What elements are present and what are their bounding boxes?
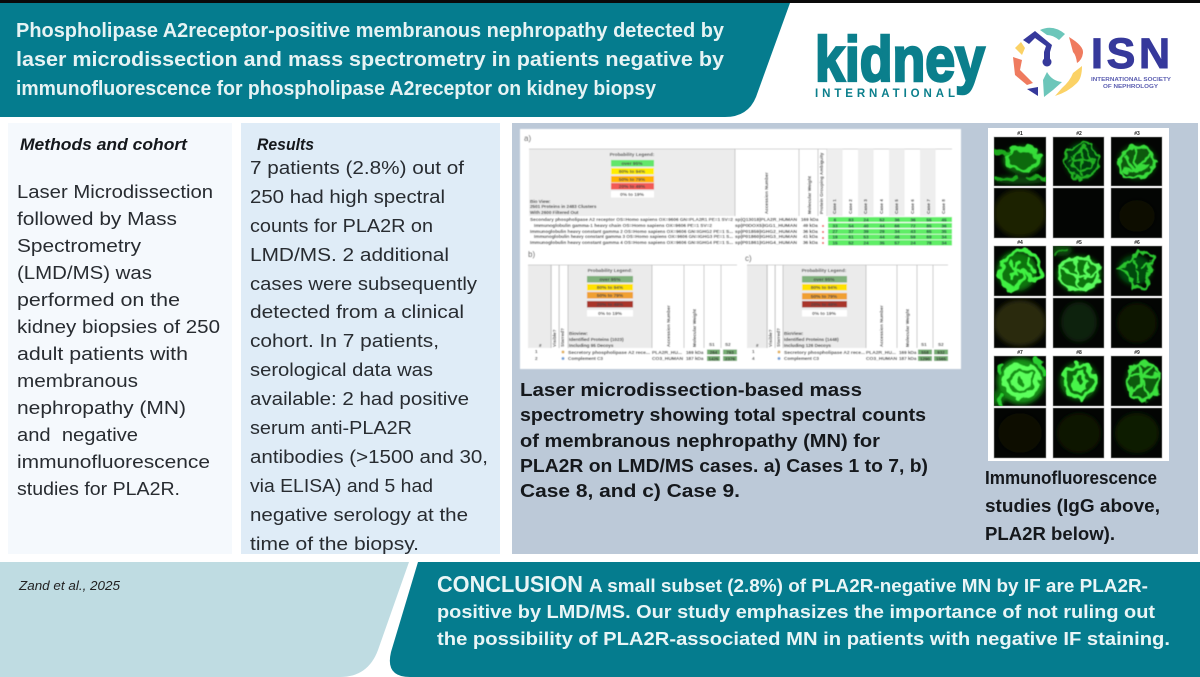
spectral counts a: 35 xyxy=(941,229,947,235)
spectral counts a: 27 xyxy=(832,229,838,235)
legend c: 0% to 19% xyxy=(812,311,837,317)
table a: Immunoglobulin gamma-1 heavy chain OS=Homo sapiens OX=9606 PE=1 SV=2 xyxy=(534,223,712,228)
spectral counts a: 19 xyxy=(832,234,838,240)
spectral counts a: 66 xyxy=(894,224,900,230)
table c: Visible? xyxy=(768,329,773,347)
legend c: 20% to 49% xyxy=(811,302,838,308)
table c: c) xyxy=(745,254,752,263)
spectral counts a: 15 xyxy=(832,240,838,246)
legend c: Probability Legend: xyxy=(802,268,847,274)
table a: sp|P01860|IGHG3_HUMAN xyxy=(735,234,798,239)
logo: ISN: OF NEPHROLOGY xyxy=(1103,84,1158,90)
table c: # xyxy=(756,343,759,348)
legend a: 0% to 19% xyxy=(620,192,645,198)
methods text xyxy=(17,181,220,499)
caption: immunofluorescence xyxy=(985,467,1160,544)
logo: ISN xyxy=(1013,28,1171,97)
caption: mass spectrometry xyxy=(520,379,928,501)
table a: Case 6 xyxy=(910,199,915,214)
table b: Secretory phospholipase A2 rece... xyxy=(568,350,650,355)
logo: ISN: INTERNATIONAL SOCIETY xyxy=(1091,77,1171,83)
results text xyxy=(250,157,488,554)
legend a: 80% to 94% xyxy=(619,169,646,175)
methods text: Spectrometry xyxy=(17,235,142,256)
panel labels: #8 xyxy=(1076,350,1082,356)
panel labels: #5 xyxy=(1076,240,1082,246)
caption: mass spectrometry: of membranous nephropathy (MN) for xyxy=(520,430,880,451)
table c xyxy=(745,254,953,362)
table a: Secondary phospholipase A2 receptor OS=Homo sapiens OX=9606 GN=PLA2R1 PE=1 SV=2 xyxy=(530,217,733,222)
table a: Immunoglobulin heavy constant gamma 3 OS=Homo sapiens OX=9606 GN=IGHG3 PE=1 S... xyxy=(534,234,733,239)
results text: serum anti-PLA2R xyxy=(250,417,412,438)
panel: results xyxy=(241,123,500,554)
heading: methods: Methods and cohort xyxy=(20,135,188,154)
heading: results: Results xyxy=(257,135,314,154)
table a: Bio View: xyxy=(530,199,551,204)
spectral counts a: 40 xyxy=(863,224,869,230)
spectral counts a: 46 xyxy=(894,234,900,240)
spectral counts a: 34 xyxy=(941,234,947,240)
legend a xyxy=(610,152,655,198)
table c: S2 xyxy=(938,342,944,347)
table c: Accession Number xyxy=(879,305,884,347)
spectral counts a: 39 xyxy=(863,229,869,235)
table a: 169 kDa xyxy=(801,217,819,222)
conclusion text xyxy=(437,571,1170,649)
table a: sp|Q13018|PLA2R_HUMAN xyxy=(735,217,798,222)
table c: Including 126 Decoys xyxy=(784,343,831,348)
panel labels xyxy=(1017,131,1140,356)
spectral counts a: 57 xyxy=(894,240,900,246)
table a: Case 5 xyxy=(894,199,899,214)
table c: Molecular Weight xyxy=(905,309,910,347)
caption: immunofluorescence: Immunofluorescence xyxy=(985,467,1157,488)
table c: 4 xyxy=(752,356,755,361)
table b: S2 xyxy=(725,342,731,347)
spectral counts a: 85 xyxy=(926,224,932,230)
table a: Protein Grouping Ambiguity xyxy=(819,152,824,214)
spectral counts a: 37 xyxy=(848,229,854,235)
table c: 169 kDa xyxy=(899,350,917,355)
table c: 187 kDa xyxy=(899,356,917,361)
image panels xyxy=(994,137,1162,458)
table a: sp|P01861|IGHG4_HUMAN xyxy=(735,240,798,245)
conclusion text: positive by LMD/MS. Our study emphasizes the importance of not ruling out xyxy=(437,601,1155,622)
citation: Zand et al., 2025 xyxy=(18,578,121,593)
spectral counts a: 34 xyxy=(894,229,900,235)
methods text: membranous xyxy=(17,370,138,391)
results text: time of the biopsy. xyxy=(250,533,419,554)
table c: 1565 xyxy=(936,356,947,362)
table a: sp|P01859|IGHG2_HUMAN xyxy=(735,229,798,234)
table b: 2 xyxy=(535,356,538,361)
table b: 1 xyxy=(535,349,538,354)
table c: Starred? xyxy=(776,328,781,347)
table b: b) xyxy=(528,250,535,259)
table b: CO3_HUMAN xyxy=(652,356,684,361)
caption: immunofluorescence: studies (IgG above, xyxy=(985,495,1160,516)
panel labels: #9 xyxy=(1134,350,1140,356)
table c: S1 xyxy=(921,342,927,347)
methods text: kidney biopsies of 250 xyxy=(17,316,220,337)
table a: 36 kDa xyxy=(803,229,818,234)
table a: Immunoglobulin heavy constant gamma 4 OS=Homo sapiens OX=9606 GN=IGHG4 PE=1 S... xyxy=(530,240,733,245)
table c: Complement C3 xyxy=(784,356,819,361)
table b xyxy=(528,250,737,362)
conclusion text: the possibility of PLA2R-associated MN in patients with negative IF staining. xyxy=(437,628,1170,649)
table c: 1 xyxy=(752,349,755,354)
table b: 264 xyxy=(710,350,718,355)
table b: 2376 xyxy=(725,356,736,362)
caption: immunofluorescence: PLA2R below). xyxy=(985,523,1115,544)
table a: 41 kDa xyxy=(803,234,818,239)
title xyxy=(16,19,725,100)
spectral counts a: 61 xyxy=(848,234,854,240)
logo: Kidney International: INTERNATIONAL xyxy=(815,88,955,100)
table b: S1 xyxy=(709,342,715,347)
spectral counts a: 29 xyxy=(879,229,885,235)
table a: a) xyxy=(524,134,531,143)
spectral counts a: 36 xyxy=(941,224,947,230)
results text: detected from a clinical xyxy=(250,301,464,322)
table a: 2501 Proteins in 2483 Clusters xyxy=(530,204,597,209)
spectral counts a: 52 xyxy=(848,240,854,246)
caption: mass spectrometry: PLA2R on LMD/MS cases. a) Cases 1 to 7, b) xyxy=(520,455,928,476)
spectral counts a xyxy=(828,217,952,246)
spectral counts a: 65 xyxy=(926,229,932,235)
table b: Starred? xyxy=(560,328,565,347)
table c: 558 xyxy=(921,350,929,355)
methods text: nephropathy (MN) xyxy=(17,397,186,418)
spectral counts a: 72 xyxy=(910,224,916,230)
table a: Immunoglobulin heavy constant gamma 2 OS=Homo sapiens OX=9606 GN=IGHG2 PE=1 S... xyxy=(530,229,733,234)
legend b: Probability Legend: xyxy=(588,268,633,274)
table b: # xyxy=(539,343,542,348)
methods text: immunofluorescence xyxy=(17,451,210,472)
results text: 250 had high spectral xyxy=(250,186,445,207)
spectral counts a: 43 xyxy=(910,229,916,235)
results text: cohort. In 7 patients, xyxy=(250,330,439,351)
title: immunofluorescence for phospholipase A2receptor on kidney biopsy xyxy=(16,77,657,100)
spectral counts a: 24 xyxy=(863,240,869,246)
table c: 932 xyxy=(937,350,945,355)
legend c: 50% to 79% xyxy=(811,294,838,300)
table a: Molecular Weight xyxy=(807,176,812,214)
table a xyxy=(524,134,952,246)
title: Phospholipase A2receptor-positive membranous nephropathy detected by xyxy=(16,19,725,42)
spectral counts a: 36 xyxy=(894,218,900,224)
legend b: 0% to 19% xyxy=(598,311,623,317)
legend a: 20% to 49% xyxy=(619,184,646,190)
spectral counts a: 35 xyxy=(879,240,885,246)
table c: BioView: xyxy=(784,331,804,336)
spectral counts a: 54 xyxy=(848,224,854,230)
caption: mass spectrometry: Laser microdissection-based mass xyxy=(520,379,862,400)
methods text: performed on the xyxy=(17,289,180,310)
methods text: followed by Mass xyxy=(17,208,177,229)
caption: mass spectrometry: spectrometry showing total spectral counts xyxy=(520,404,926,425)
logo: ISN: ISN xyxy=(1091,30,1170,78)
dim PLA2R staining xyxy=(994,189,1159,453)
spectral counts a: 24 xyxy=(910,240,916,246)
legend b: 20% to 49% xyxy=(597,302,624,308)
table c: PLA2R_HU... xyxy=(866,350,896,355)
icon: ISN ring xyxy=(1013,28,1083,97)
table a: sp|P0DOX5|IGG1_HUMAN xyxy=(735,223,798,228)
conclusion text: A small subset (2.8%) of PLA2R-negative MN by IF are PLA2R- xyxy=(589,575,1148,596)
header banner xyxy=(0,3,790,117)
immunofluorescence image grid xyxy=(988,128,1169,461)
table c: 1290 xyxy=(920,356,931,362)
table a: 36 kDa xyxy=(803,240,818,245)
table b: Identified Proteins (1023) xyxy=(569,337,624,342)
table c: CO3_HUMAN xyxy=(866,356,898,361)
spectral counts a: 24 xyxy=(863,218,869,224)
table b: Bioview: xyxy=(569,331,588,336)
table b: Including 95 Decoys xyxy=(569,343,614,348)
legend b xyxy=(587,268,633,317)
legend b: 50% to 79% xyxy=(597,293,624,299)
table b: PLA2R_HU... xyxy=(652,350,682,355)
spectral counts a: 55 xyxy=(926,218,932,224)
methods text: (LMD/MS) was xyxy=(17,262,152,283)
table b: Accession Number xyxy=(666,305,671,347)
table a: Case 3 xyxy=(863,199,868,214)
footer citation band xyxy=(0,562,409,677)
caption: mass spectrometry: Case 8, and c) Case 9. xyxy=(520,480,740,501)
table b: Complement C3 xyxy=(568,356,603,361)
spectral counts a: 53 xyxy=(863,234,869,240)
table a: Case 2 xyxy=(848,199,853,214)
panel: methods and cohort xyxy=(8,123,232,554)
legend c: 80% to 94% xyxy=(811,285,838,291)
table c: Identified Proteins (1448) xyxy=(784,337,839,342)
table a: With 2600 Filtered Out xyxy=(530,210,579,215)
spectral counts a: 33 xyxy=(832,224,838,230)
spectral counts a: 83 xyxy=(848,218,854,224)
results text: cases were subsequently xyxy=(250,273,478,294)
table c: Secretory phospholipase A2 rece... xyxy=(784,350,865,355)
results text: LMD/MS. 2 additional xyxy=(250,244,449,265)
spectral counts a: 59 xyxy=(910,234,916,240)
methods text: Laser Microdissection xyxy=(17,181,213,202)
table a: 49 kDa xyxy=(803,223,818,228)
conclusion band xyxy=(390,562,1200,677)
legend c xyxy=(802,268,847,317)
table b: 793 xyxy=(726,350,734,355)
spectral counts a: 45 xyxy=(941,218,947,224)
results text: available: 2 had positive xyxy=(250,388,469,409)
legend a: 50% to 79% xyxy=(619,177,646,183)
spectral counts a: 44 xyxy=(879,224,885,230)
spectral counts a: 52 xyxy=(879,218,885,224)
panel: figures xyxy=(512,123,1198,554)
spectral counts a: 36 xyxy=(910,218,916,224)
panel labels: #4 xyxy=(1017,240,1023,246)
spectral counts a: 6 xyxy=(834,218,837,224)
panel labels: #7 xyxy=(1017,350,1023,356)
table a: Case 7 xyxy=(926,199,931,214)
methods text: studies for PLA2R. xyxy=(17,478,180,499)
panel labels: #3 xyxy=(1134,131,1140,137)
IgG haze xyxy=(991,142,1160,406)
results text: serological data was xyxy=(250,359,433,380)
table a: Accession Number xyxy=(764,172,769,214)
spectral counts a: 69 xyxy=(926,234,932,240)
legend b: over 95% xyxy=(599,277,621,283)
table a: Case 4 xyxy=(879,199,884,214)
table b: Molecular Weight xyxy=(692,309,697,347)
results text: counts for PLA2R on xyxy=(250,215,433,236)
results text: via ELISA) and 5 had xyxy=(250,475,433,496)
results text: 7 patients (2.8%) out of xyxy=(250,157,465,178)
legend c: over 95% xyxy=(813,277,835,283)
legend a: over 95% xyxy=(621,161,643,167)
panel labels: #2 xyxy=(1076,131,1082,137)
legend b: 80% to 94% xyxy=(597,285,624,291)
methods text: and negative xyxy=(17,424,138,445)
spectral counts a: 44 xyxy=(879,234,885,240)
table b: 1425 xyxy=(708,356,719,362)
table a: Case 1 xyxy=(832,199,837,214)
table b: 169 kDa xyxy=(686,350,704,355)
methods text: adult patients with xyxy=(17,343,188,364)
panel labels: #6 xyxy=(1134,240,1140,246)
panel labels: #1 xyxy=(1017,131,1023,137)
table b: 187 kDa xyxy=(686,356,704,361)
results text: antibodies (>1500 and 30, xyxy=(250,446,488,467)
legend a: Probability Legend: xyxy=(610,152,655,158)
spectral counts a: 34 xyxy=(941,240,947,246)
title: laser microdissection and mass spectrometry in patients negative by xyxy=(16,48,725,71)
conclusion text: CONCLUSION xyxy=(437,571,583,597)
table b: Visible? xyxy=(552,329,557,347)
mass spectrometry tables xyxy=(520,129,961,369)
results text: negative serology at the xyxy=(250,504,468,525)
table a: Case 8 xyxy=(941,199,946,214)
spectral counts a: 78 xyxy=(926,240,932,246)
logo: Kidney International: kidney xyxy=(815,25,985,95)
IgG glomeruli xyxy=(996,143,1159,403)
